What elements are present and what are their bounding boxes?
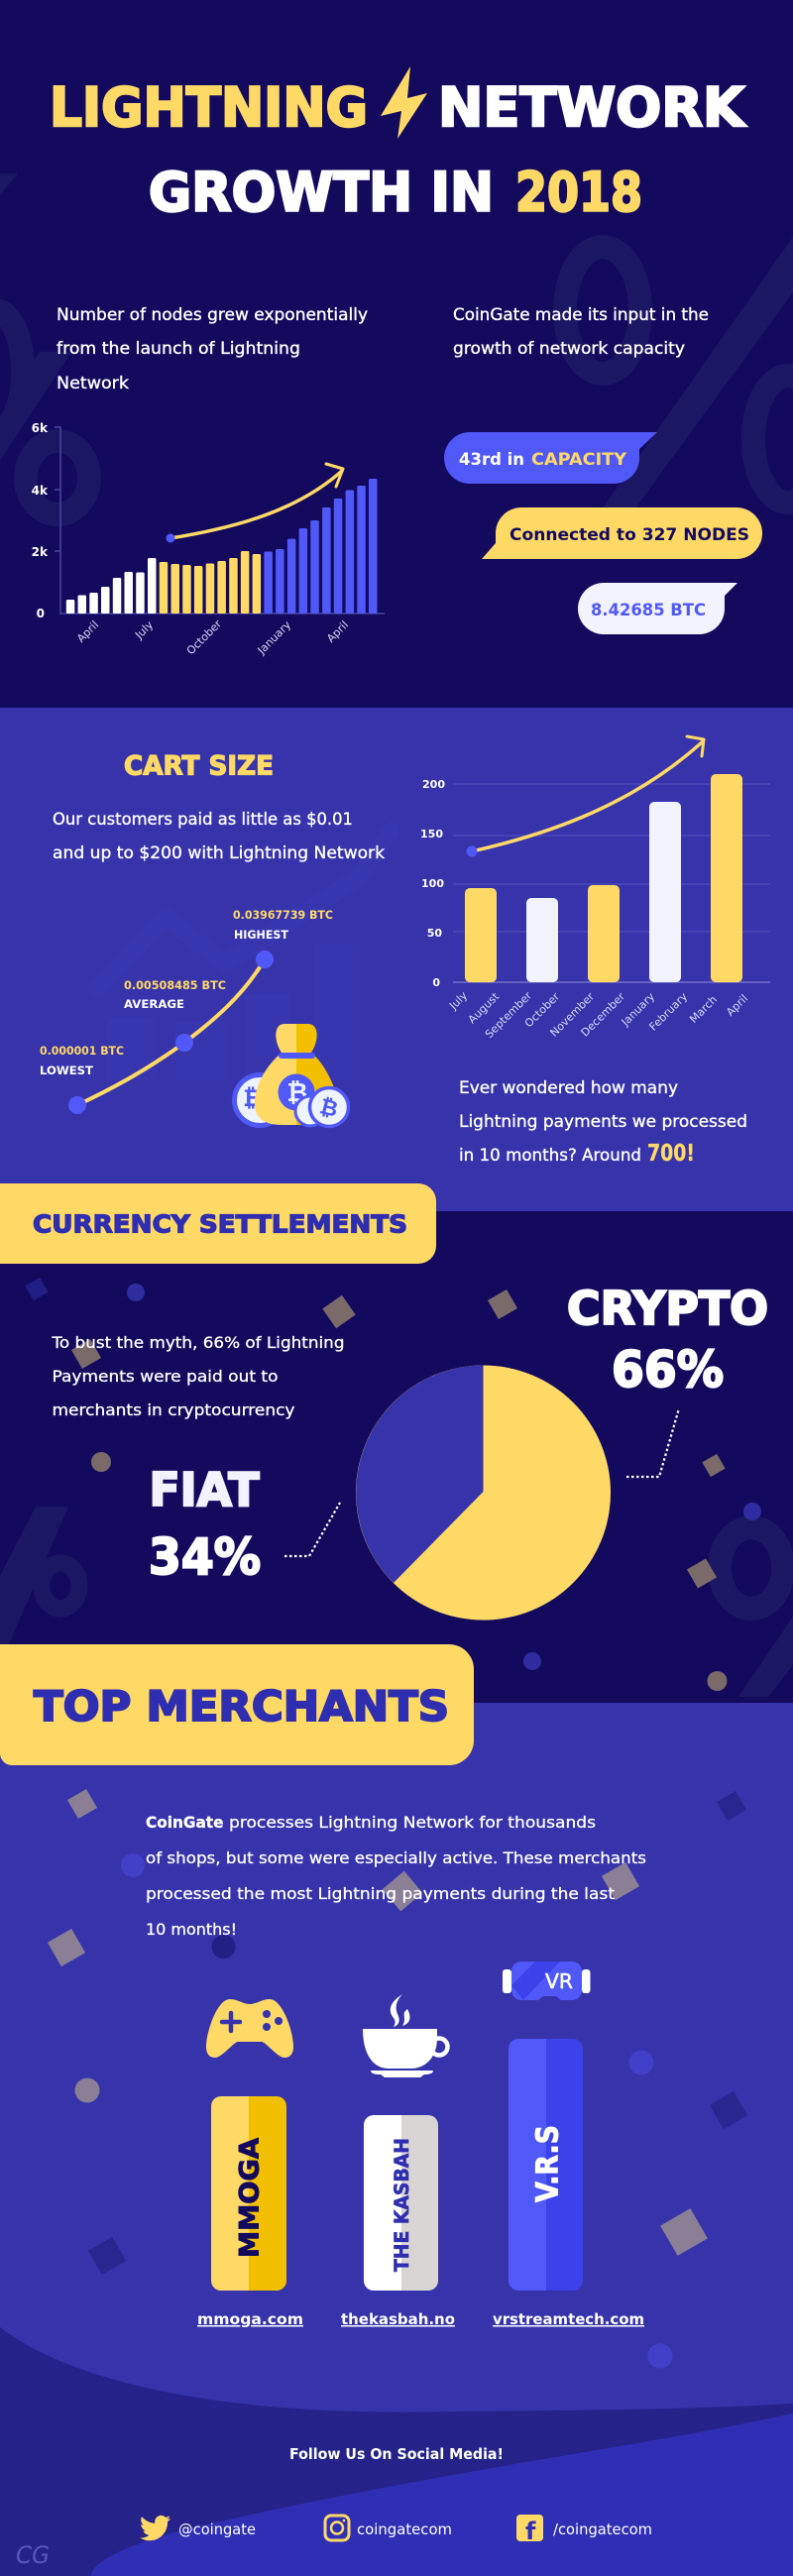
chart: cart size curve: HIGHEST — [234, 928, 288, 942]
text: payments processed — [459, 1078, 747, 1167]
chart: cart size curve: LOWEST — [40, 1064, 93, 1077]
links: merchants — [197, 2310, 644, 2328]
bar chart: payments per month: 100 — [421, 877, 444, 890]
callout: capacity rank — [444, 432, 657, 484]
text: merchants intro: processes Lightning Network for thousands — [229, 1813, 596, 1832]
background: footer waves — [0, 2327, 793, 2576]
text: payments processed: 700! — [647, 1141, 695, 1167]
bar chart: payments per month: 0 — [432, 976, 440, 989]
text: coingate input: growth of network capacity — [453, 339, 685, 359]
bar: mmoga — [211, 2096, 286, 2291]
callout: btc capacity: 8.42685 BTC — [591, 601, 706, 620]
background: settlements decorations — [0, 1278, 793, 1697]
bar chart: nodes: 6k — [32, 421, 49, 435]
bar chart: nodes: April — [324, 618, 351, 645]
social: facebook: /coingatecom — [553, 2520, 652, 2538]
callout: nodes connected — [482, 507, 762, 559]
callout: capacity rank: CAPACITY — [531, 450, 627, 470]
text: nodes growth — [57, 305, 368, 393]
heading tab: currency settlements: CURRENCY SETTLEMENTS — [33, 1209, 407, 1239]
bar chart: nodes: 4k — [32, 484, 49, 498]
text: bust the myth: merchants in cryptocurrency — [52, 1400, 295, 1419]
bar chart: nodes: January — [255, 618, 293, 657]
bar chart: payments per month: 150 — [420, 828, 443, 840]
bar: the kasbah: THE KASBAH — [391, 2138, 413, 2272]
icon: money bag with coins: ₿ — [286, 1078, 308, 1108]
bar: vrs — [509, 2039, 583, 2291]
icon: gamepad — [206, 1999, 293, 2058]
label: fiat share: 34% — [149, 1528, 261, 1586]
chart: cart size curve: 0.000001 BTC — [40, 1044, 124, 1058]
pie chart: settlements — [356, 1366, 611, 1620]
text: merchants intro: CoinGate — [146, 1813, 224, 1832]
background: percent watermarks header — [0, 173, 793, 514]
bar chart: payments per month: August — [466, 989, 503, 1026]
icon: money bag with coins: ₿ — [317, 1094, 340, 1123]
bar chart: payments per month: March — [687, 993, 720, 1026]
text: nodes growth: Network — [57, 374, 129, 393]
social: twitter: @coingate — [178, 2520, 256, 2538]
panel: cart size — [0, 708, 793, 1211]
text: coingate input — [453, 305, 709, 359]
heading tab: top merchants — [0, 1644, 474, 1765]
bar: vrs: V.R.S — [531, 2125, 565, 2202]
icon: money bag with coins: ₿ — [243, 1084, 263, 1112]
arrow: payments trend — [466, 736, 704, 856]
bar chart: nodes: 2k — [32, 545, 49, 559]
panel: top merchants — [0, 1644, 793, 2576]
bar chart: payments per month: April — [724, 992, 750, 1019]
text: cart range: and up to $200 with Lightning Network — [53, 843, 385, 863]
bar chart: nodes — [32, 421, 385, 657]
heading tab: top merchants: TOP MERCHANTS — [34, 1682, 449, 1731]
background: merchants decorations — [48, 1789, 747, 2369]
social: twitter — [140, 2516, 256, 2540]
bar chart: payments per month: December — [579, 990, 627, 1039]
logo: coingate: CG — [16, 2541, 50, 2569]
links: merchants: vrstreamtech.com — [493, 2310, 644, 2328]
text: merchants intro — [146, 1813, 646, 1939]
text: payments processed: in 10 months? Around — [459, 1146, 641, 1166]
bar chart: payments per month: February — [646, 990, 690, 1034]
bar chart: payments per month: November — [547, 990, 597, 1040]
bar chart: nodes: July — [132, 618, 156, 642]
callout: nodes connected: Connected to 327 NODES — [510, 525, 749, 545]
bar chart: payments per month: October — [522, 990, 562, 1030]
bar: the kasbah — [364, 2115, 438, 2291]
text: bust the myth — [51, 1333, 345, 1419]
bar chart: nodes: April — [74, 618, 101, 645]
bar chart: payments per month: September — [483, 989, 534, 1041]
social: instagram — [325, 2516, 452, 2540]
icon: vr headset: VR — [545, 1969, 573, 1993]
social: instagram: coingatecom — [357, 2520, 452, 2538]
bar: mmoga: MMOGA — [234, 2138, 266, 2258]
heading tab: currency settlements — [0, 1183, 436, 1264]
label: crypto share: 66% — [612, 1341, 724, 1399]
bar chart: payments per month: July — [446, 989, 470, 1013]
bar chart: nodes: 0 — [37, 607, 45, 620]
chart: cart size curve: 0.00508485 BTC — [124, 978, 226, 992]
icon: vr headset — [503, 1961, 591, 2000]
icon: lightning bolt — [381, 66, 427, 139]
text: nodes growth: from the launch of Lightning — [57, 339, 300, 359]
text: bust the myth: To bust the myth, 66% of Lightning — [51, 1333, 345, 1352]
chart: cart size curve: AVERAGE — [124, 997, 184, 1011]
text: cart range: Our customers paid as little as $0.01 — [53, 810, 353, 830]
text: merchants intro: of shops, but some were especially active. These merchants — [146, 1848, 646, 1867]
text: bust the myth: Payments were paid out to — [52, 1367, 278, 1386]
links: merchants: thekasbah.no — [341, 2310, 455, 2328]
label: fiat share — [149, 1463, 340, 1586]
text: merchants intro: processed the most Lightning payments during the last — [146, 1884, 615, 1903]
label: fiat share: FIAT — [149, 1463, 260, 1516]
title: LIGHTNING — [50, 76, 368, 139]
label: crypto share — [567, 1282, 768, 1477]
background: house arrow watermark — [97, 831, 391, 1080]
bar chart: payments per month: 50 — [427, 927, 442, 940]
arrow: nodes trend — [167, 464, 343, 543]
bar chart: nodes: October — [184, 617, 224, 657]
title: GROWTH IN — [149, 161, 494, 224]
heading: cart size: CART SIZE — [124, 751, 274, 781]
social: facebook — [516, 2515, 652, 2545]
text: follow us: Follow Us On Social Media! — [289, 2445, 504, 2463]
social: facebook: f — [525, 2518, 536, 2545]
label: crypto share: CRYPTO — [567, 1282, 768, 1335]
text: cart range — [53, 810, 385, 863]
bar chart: payments per month — [420, 774, 770, 1041]
icon: coffee cup — [363, 1994, 448, 2077]
text: payments processed: Ever wondered how many — [459, 1078, 678, 1098]
text: nodes growth: Number of nodes grew exponentially — [57, 305, 368, 325]
title: NETWORK — [438, 76, 746, 139]
text: payments processed: Lightning payments we processed — [459, 1112, 747, 1132]
title: 2018 — [515, 161, 642, 224]
text: merchants intro: 10 months! — [146, 1920, 237, 1939]
callout: capacity rank: 43rd in — [459, 450, 524, 470]
bar chart: payments per month: January — [619, 990, 657, 1029]
bar chart: payments per month: 200 — [422, 778, 445, 791]
links: merchants: mmoga.com — [197, 2310, 303, 2328]
chart: cart size curve: 0.03967739 BTC — [233, 908, 333, 922]
text: coingate input: CoinGate made its input in the — [453, 305, 709, 325]
chart: cart size curve — [40, 908, 333, 1114]
title — [50, 66, 746, 224]
icon: money bag with coins — [234, 1024, 349, 1126]
callout: btc capacity — [578, 583, 737, 634]
